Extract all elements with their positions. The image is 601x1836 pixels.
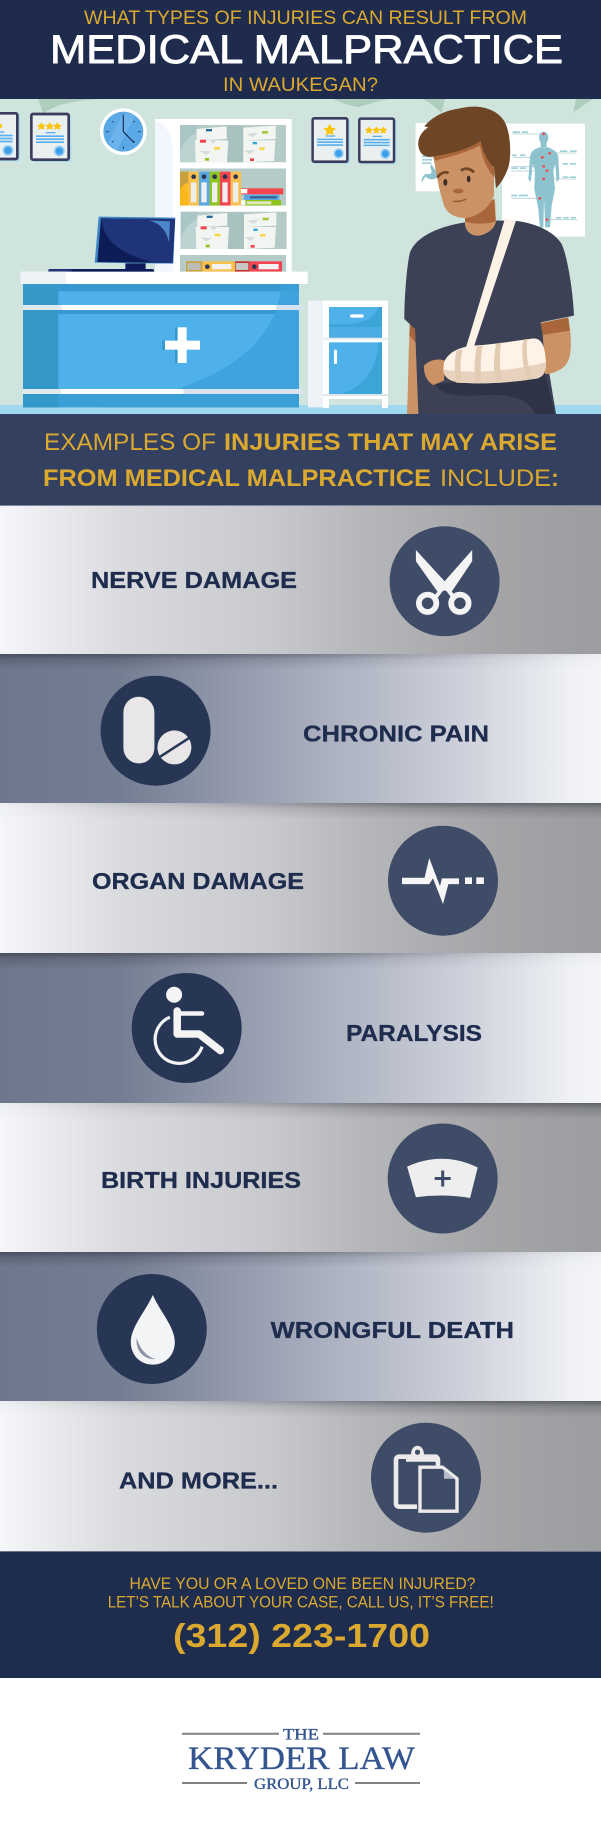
anatomy poster: stomach: [416, 123, 447, 191]
row: wrongful death: [0, 1252, 601, 1401]
framed certificates: [313, 118, 396, 164]
phone number: (312) 223-1700: [173, 1617, 430, 1654]
row: organ damage: [0, 803, 601, 953]
reception counter: [21, 272, 308, 407]
icon: clipboard and document: [371, 1423, 481, 1533]
heading band: examples of injuries: FROM MEDICAL MALPRACTICE: [43, 466, 431, 492]
man: sling strap: [466, 218, 516, 347]
title line: medical malpractice: MEDICAL MALPRACTICE: [50, 28, 563, 72]
row: nerve damage: [0, 505, 601, 654]
title line: what types of injuries: WHAT TYPES OF INJURIES CAN RESULT FROM: [84, 7, 527, 29]
row: birth injuries: [0, 1103, 601, 1252]
anatomy poster: body diagram: [502, 124, 585, 237]
injured man: [404, 107, 574, 414]
man: face: [433, 141, 494, 218]
label: CHRONIC PAIN: [303, 721, 489, 747]
man: hair: [418, 107, 510, 188]
heading band: examples of injuries: EXAMPLES OF: [44, 430, 216, 456]
icon: nurse cap: [388, 1124, 498, 1234]
right half of the room: [308, 99, 593, 414]
man: far arm: [543, 329, 571, 374]
heading band: examples of injuries: INCLUDE: [440, 466, 551, 492]
counter cross: [162, 327, 200, 363]
illustration: hospital room with injured man: [0, 99, 601, 414]
heading band: examples of injuries: [0, 414, 601, 505]
man: shirt shadow: [435, 374, 555, 414]
call to action text: HAVE YOU OR A LOVED ONE BEEN INJURED?: [130, 1574, 476, 1593]
framed certificates: [0, 113, 71, 162]
label: WRONGFUL DEATH: [271, 1317, 514, 1343]
label: ORGAN DAMAGE: [92, 868, 304, 894]
man: hand: [424, 359, 445, 385]
side cabinet: [308, 301, 388, 408]
label: AND MORE...: [119, 1468, 278, 1494]
man: shirt: [404, 221, 574, 414]
row: paralysis: [0, 953, 601, 1103]
wall clock: [100, 108, 147, 155]
label: PARALYSIS: [346, 1020, 482, 1046]
icon: heartbeat line: [388, 826, 498, 936]
row: chronic pain: [0, 654, 601, 803]
header banner: [0, 0, 601, 99]
logo: the kryder law group: GROUP, LLC: [254, 1776, 349, 1793]
call to action band: [0, 1551, 601, 1678]
row: and more: [0, 1401, 601, 1551]
bookshelf: [155, 119, 292, 272]
man: near arm: [407, 324, 418, 414]
computer monitor: [48, 217, 175, 273]
left half of the room: [0, 99, 308, 407]
title line: in waukegan: IN WAUKEGAN?: [223, 74, 378, 96]
heading band: examples of injuries: :: [551, 466, 559, 492]
logo: the kryder law group: THE: [283, 1726, 319, 1744]
leaf decorations: [333, 99, 593, 113]
logo: the kryder law group: [182, 1726, 420, 1793]
logo: the kryder law group: KRYDER LAW: [188, 1741, 416, 1777]
icon: drop: [97, 1274, 207, 1384]
leaf decoration: [38, 99, 100, 114]
heading band: examples of injuries: INJURIES THAT MAY ARISE: [224, 430, 557, 456]
binders: [180, 168, 286, 206]
icon: scissors: [390, 526, 500, 636]
man: neck: [465, 199, 496, 236]
man: facial features: [443, 179, 447, 186]
call to action band: LET’S TALK ABOUT YOUR CASE, CALL US, IT’S FREE!: [108, 1592, 494, 1611]
label: NERVE DAMAGE: [91, 567, 297, 593]
icon: wheelchair: [132, 973, 242, 1083]
man: arm cast: [443, 338, 546, 383]
label: BIRTH INJURIES: [101, 1167, 301, 1193]
bottom shelf: [180, 255, 286, 272]
icon: pills: [101, 676, 211, 786]
